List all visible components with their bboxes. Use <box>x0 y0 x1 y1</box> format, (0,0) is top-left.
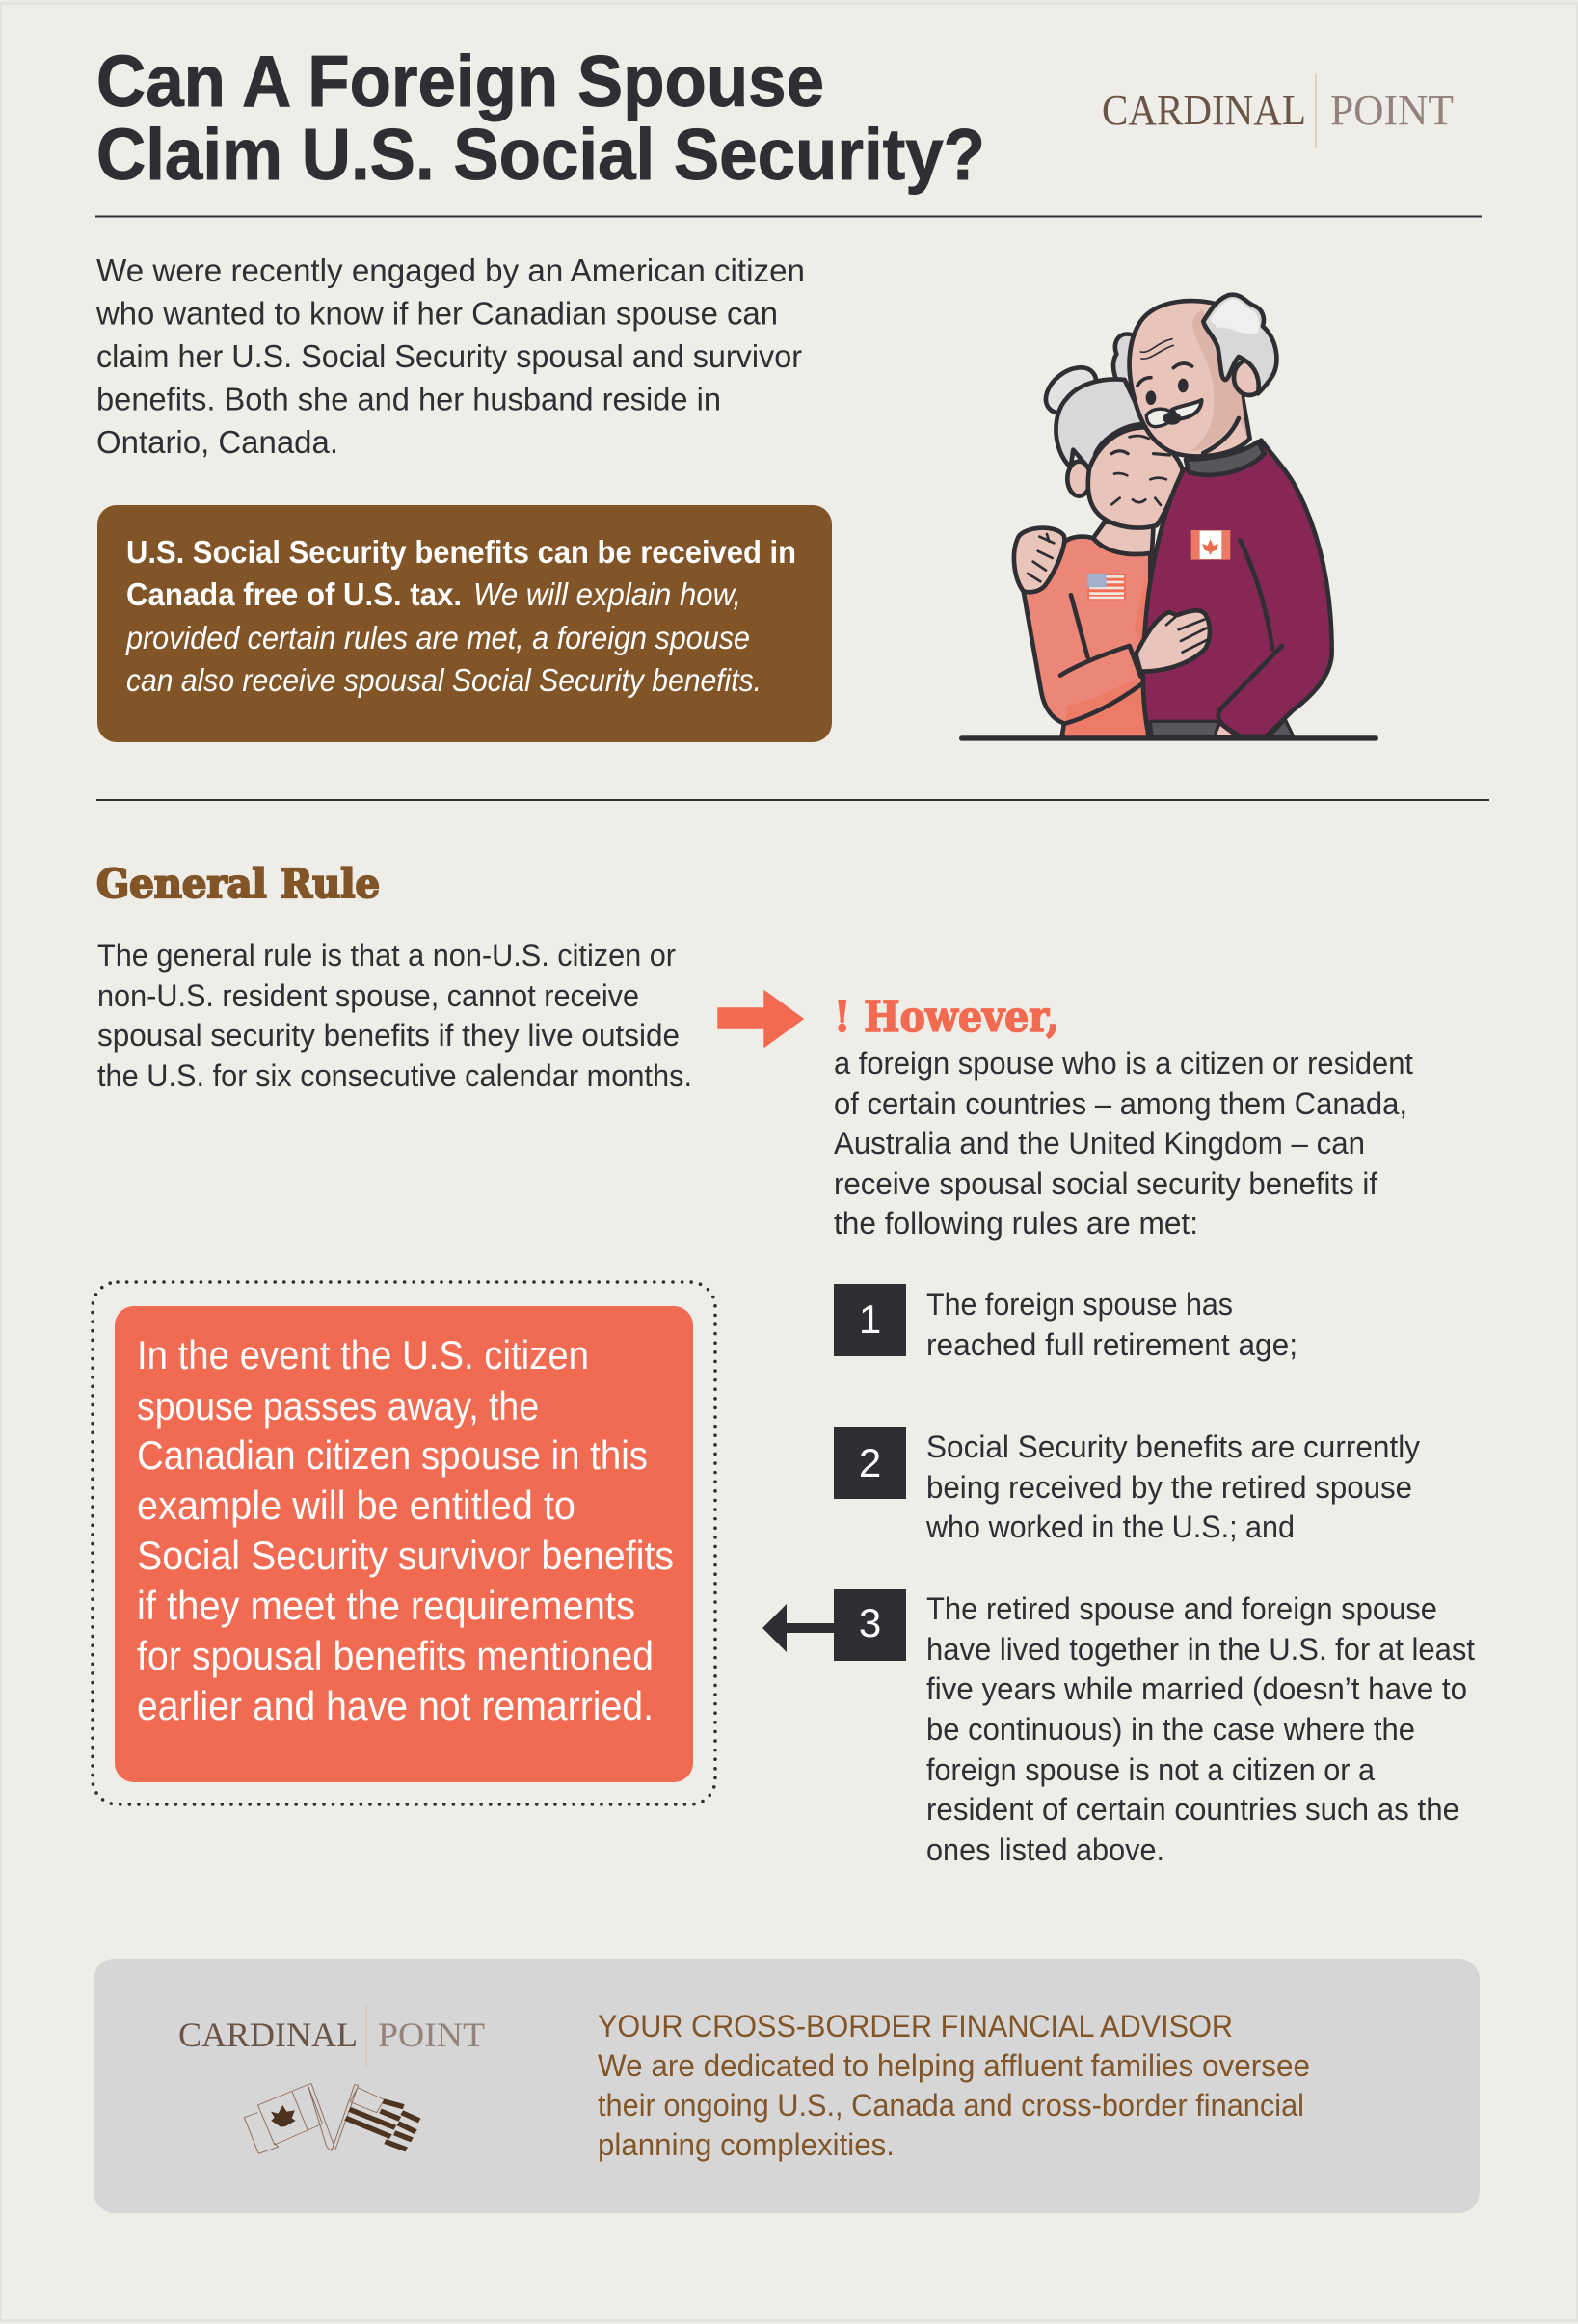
text: However paragraph: a foreign spouse who is a citizen or resident <box>834 1046 1413 1081</box>
panel: survivor benefits callout: example will be entitled to <box>137 1483 575 1528</box>
panel: survivor benefits callout: if they meet the requirements <box>137 1583 635 1628</box>
rule 1: 1 <box>859 1296 881 1342</box>
icon: woman's fingers on shoulder <box>1028 534 1054 581</box>
icon: man's chin line <box>1203 418 1239 453</box>
callout: brown tax note: Canada free of U.S. tax. <box>126 577 462 613</box>
text: general rule paragraph: spousal security benefits if they live outside <box>97 1018 680 1053</box>
icon: woman's sleeve lines <box>1060 595 1141 724</box>
callout: brown tax note <box>97 505 832 742</box>
rule 1: The foreign spouse has <box>926 1287 1233 1322</box>
text: However paragraph <box>834 1046 1413 1241</box>
title: Can A Foreign Spouse <box>96 40 824 121</box>
icon: man's head <box>1130 301 1250 456</box>
callout: brown tax note: We will explain how, <box>473 577 741 613</box>
text: footer advisor: We are dedicated to helping affluent families oversee <box>598 2048 1310 2083</box>
logo: Cardinal Point header: CARDINAL <box>1102 87 1306 134</box>
icon: man's face shade <box>1190 310 1246 451</box>
icon: woman's hair <box>1056 379 1145 471</box>
icon: man's far-side hair behind head <box>1113 334 1135 403</box>
heading: However: ! However, <box>834 993 1059 1042</box>
intro paragraph <box>95 254 805 461</box>
icon: man's sleeve folds <box>1218 541 1282 736</box>
text: footer advisor: YOUR CROSS-BORDER FINANCIAL ADVISOR <box>598 2009 1233 2044</box>
icon: woman's ear <box>1067 462 1090 496</box>
icon: Canadian flag patch <box>1191 530 1230 560</box>
text: footer advisor <box>598 2009 1310 2162</box>
logo: Cardinal Point footer: POINT <box>378 2016 485 2054</box>
text: footer advisor: planning complexities. <box>598 2127 895 2162</box>
intro paragraph: We were recently engaged by an American citizen <box>96 254 805 289</box>
logo: Cardinal Point header <box>1102 74 1454 148</box>
rule 3: five years while married (doesn’t have to <box>926 1671 1467 1706</box>
rule 2 <box>834 1427 1420 1544</box>
illustration: elderly couple hugging <box>959 295 1378 741</box>
rule 3: ones listed above. <box>926 1832 1164 1867</box>
icon: man's hair highlight <box>1210 299 1259 334</box>
icon: crossed flags <box>244 2084 419 2153</box>
callout: brown tax note: provided certain rules are met, a foreign spouse <box>125 621 750 656</box>
icon: woman's hair bun <box>1037 359 1105 422</box>
arrow: right to However <box>718 991 803 1047</box>
title: Claim U.S. Social Security? <box>96 114 985 195</box>
panel: survivor benefits callout: for spousal benefits mentioned <box>137 1633 654 1678</box>
icon: man's hair <box>1203 295 1276 393</box>
rule 2: Social Security benefits are currently <box>926 1429 1420 1464</box>
intro paragraph: claim her U.S. Social Security spousal and survivor <box>96 339 802 375</box>
text: However paragraph: of certain countries – among them Canada, <box>834 1086 1407 1121</box>
text: footer advisor: their ongoing U.S., Canada and cross-border financial <box>598 2088 1304 2123</box>
callout: brown tax note: can also receive spousal Social Security benefits. <box>126 663 762 699</box>
ground line <box>959 735 1378 741</box>
icon: woman's neck <box>1093 522 1154 554</box>
rule 3: have lived together in the U.S. for at least <box>926 1632 1475 1667</box>
panel: survivor benefits callout: Canadian citizen spouse in this <box>137 1432 648 1478</box>
rule 3: foreign spouse is not a citizen or a <box>926 1752 1375 1787</box>
icon: woman's sweater <box>1024 537 1150 736</box>
rule 1: reached full retirement age; <box>926 1327 1297 1362</box>
arrow: left from rule 3 <box>762 1604 834 1652</box>
text: general rule paragraph: the U.S. for six consecutive calendar months. <box>97 1058 692 1093</box>
rule 3: The retired spouse and foreign spouse <box>926 1591 1437 1626</box>
icon: woman's facial features <box>1111 436 1169 505</box>
rule 2: who worked in the U.S.; and <box>925 1509 1295 1544</box>
icon: man's hand <box>1217 726 1232 735</box>
text: However paragraph: Australia and the United Kingdom – can <box>834 1126 1365 1161</box>
rule 3: resident of certain countries such as the <box>926 1792 1459 1827</box>
intro paragraph: benefits. Both she and her husband reside in <box>96 382 721 418</box>
intro paragraph: Ontario, Canada. <box>96 425 338 461</box>
heading: General Rule: General Rule <box>96 861 380 907</box>
text: general rule paragraph: The general rule is that a non-U.S. citizen or <box>97 938 676 973</box>
title <box>96 40 985 195</box>
icon: man's facial features <box>1137 339 1202 427</box>
logo: Cardinal Point footer <box>178 2005 485 2067</box>
callout: brown tax note: U.S. Social Security benefits can be received in <box>126 535 796 571</box>
text: general rule paragraph: non-U.S. resident spouse, cannot receive <box>97 978 639 1013</box>
icon: man's ear <box>1234 360 1265 395</box>
icon: woman's face <box>1088 427 1183 528</box>
panel: survivor benefits callout: earlier and have not remarried. <box>137 1683 654 1728</box>
logo: Cardinal Point header: POINT <box>1330 87 1454 134</box>
text: However paragraph: the following rules are met: <box>834 1206 1198 1241</box>
icon: man's sweater <box>1143 441 1332 736</box>
panel: survivor benefits callout: Social Security survivor benefits <box>137 1533 674 1578</box>
rule 1 <box>834 1284 1297 1362</box>
panel: survivor benefits callout <box>93 1282 715 1804</box>
panel: survivor benefits callout: In the event the U.S. citizen <box>137 1332 589 1377</box>
text: However paragraph: receive spousal social security benefits if <box>834 1166 1377 1201</box>
rule 2: being received by the retired spouse <box>926 1470 1412 1505</box>
icon: American flag patch <box>1087 574 1126 600</box>
icon: woman's fingers on chest <box>1166 618 1208 653</box>
icon: woman's hand on shoulder <box>1014 528 1064 592</box>
panel: survivor benefits callout: spouse passes away, the <box>137 1383 539 1429</box>
icon: woman's sweater shade <box>1065 575 1147 736</box>
icon: man's collar <box>1186 441 1265 475</box>
text: general rule paragraph <box>97 938 692 1093</box>
panel: footer <box>94 1959 1480 2213</box>
logo: Cardinal Point footer: CARDINAL <box>178 2016 358 2054</box>
rule 2: 2 <box>859 1440 881 1485</box>
icon: man's sweater hem <box>1150 720 1294 736</box>
rule 3: 3 <box>859 1600 881 1645</box>
icon: woman's hand on chest <box>1136 610 1210 672</box>
rule 3: be continuous) in the case where the <box>926 1712 1415 1747</box>
rule 3 <box>834 1589 1475 1867</box>
intro paragraph: who wanted to know if her Canadian spouse can <box>95 297 778 332</box>
